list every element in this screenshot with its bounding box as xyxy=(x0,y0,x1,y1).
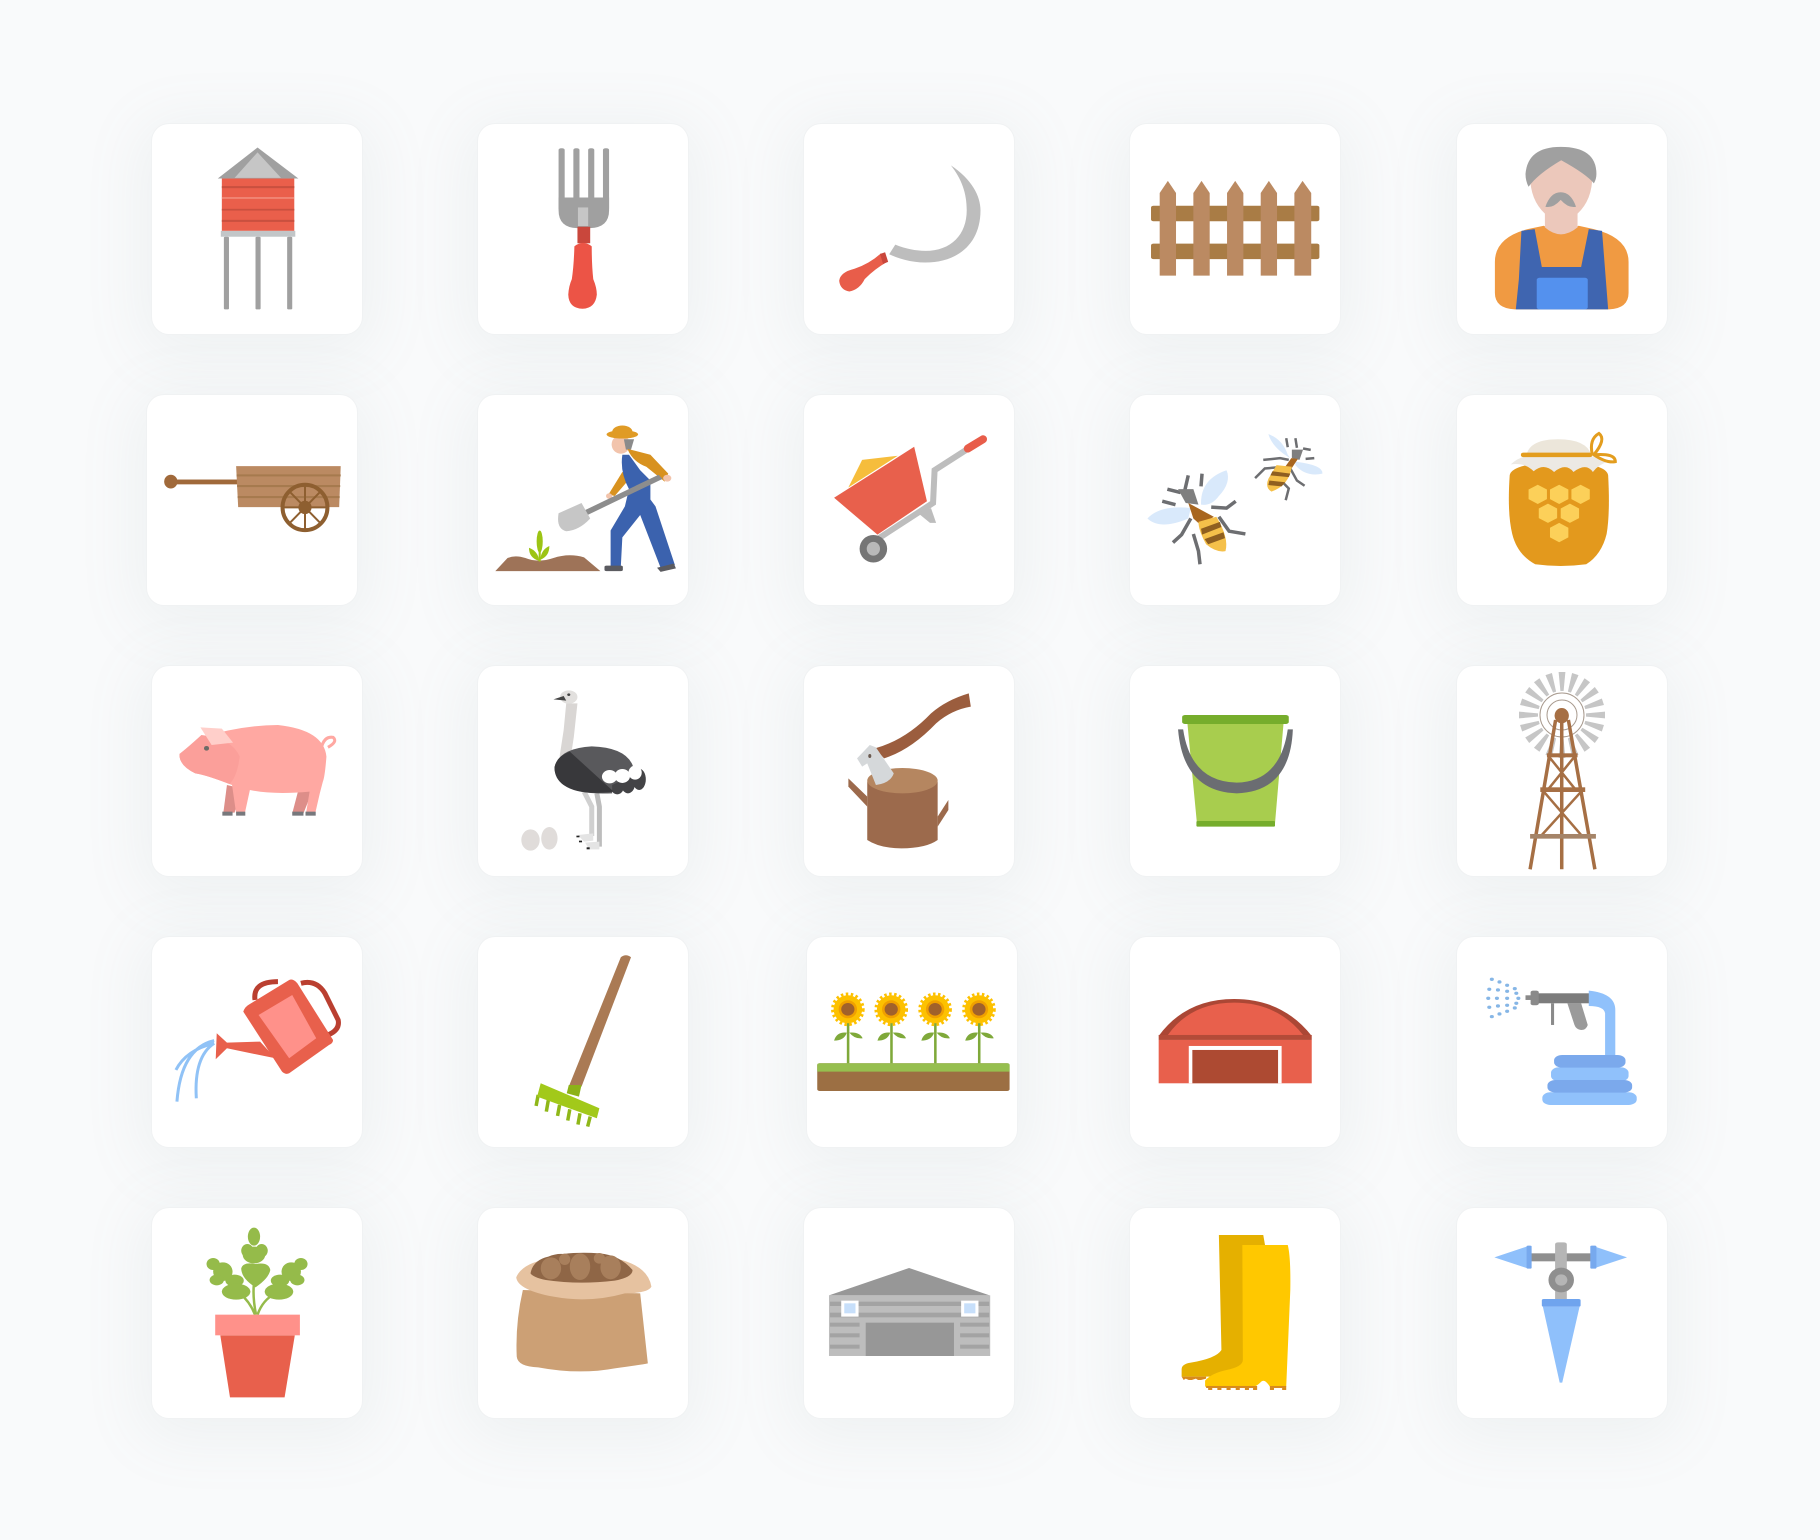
icon: seed sack xyxy=(516,1253,651,1371)
sunflower 1 xyxy=(833,994,863,1063)
panel: garden fork xyxy=(478,124,688,334)
panel: watering can xyxy=(152,937,362,1147)
sprinkler post xyxy=(1548,1242,1574,1301)
icon: honey jar xyxy=(1509,433,1615,566)
honeycomb xyxy=(1529,485,1590,542)
farmer head xyxy=(1530,159,1592,234)
fence posts xyxy=(1160,181,1311,276)
shovel xyxy=(558,475,663,531)
barrow grip xyxy=(968,439,983,449)
panel: potted plant xyxy=(152,1208,362,1418)
icon: pig xyxy=(179,725,335,816)
seeds xyxy=(531,1253,633,1283)
panel: farmer digging xyxy=(478,395,688,605)
large bee xyxy=(1147,470,1245,564)
can handles xyxy=(255,982,338,1035)
stump xyxy=(848,768,948,848)
barn wall xyxy=(1159,1040,1312,1083)
icon: irrigation sprinkler xyxy=(1494,1242,1627,1383)
panel: pig xyxy=(152,666,362,876)
panel: irrigation sprinkler xyxy=(1457,1208,1667,1418)
fork head xyxy=(559,148,609,228)
shed wall xyxy=(829,1295,990,1356)
ostrich legs xyxy=(576,792,599,849)
cart box xyxy=(236,466,341,507)
tower legs xyxy=(224,237,292,309)
barrow wheel xyxy=(860,535,887,563)
windmill tower xyxy=(1530,708,1596,869)
seedling xyxy=(529,530,549,561)
tower roof xyxy=(218,148,298,179)
panel: rake xyxy=(478,937,688,1147)
worker xyxy=(604,425,676,572)
small bee xyxy=(1255,434,1322,500)
icon: bucket xyxy=(1178,715,1293,827)
panel: fence xyxy=(1130,124,1340,334)
panel: seed sack xyxy=(478,1208,688,1418)
rake teeth xyxy=(536,1095,590,1127)
overalls xyxy=(1516,229,1608,309)
axe head xyxy=(857,745,894,785)
fork handle xyxy=(568,243,597,309)
icon: windmill xyxy=(1519,672,1605,869)
ostrich body xyxy=(554,746,646,794)
pig far legs xyxy=(223,785,313,813)
icon: storage shed xyxy=(829,1268,990,1356)
panel: water tower xyxy=(152,124,362,334)
plant leaves xyxy=(207,1228,308,1315)
fence rails xyxy=(1151,206,1319,259)
icon: garden hose xyxy=(1486,978,1637,1105)
panel: barn xyxy=(1130,937,1340,1147)
tower tank xyxy=(222,179,294,231)
icon: red barn xyxy=(1159,999,1312,1083)
panel: bees xyxy=(1130,395,1340,605)
icon: potted plant xyxy=(207,1228,308,1397)
sunflower 3 xyxy=(920,994,950,1063)
bucket handle xyxy=(1178,729,1293,793)
panel: rubber boots xyxy=(1130,1208,1340,1418)
icon: wheelbarrow xyxy=(834,439,983,563)
sack body xyxy=(516,1290,648,1371)
hose coils xyxy=(1542,1055,1637,1105)
icon: rubber boots xyxy=(1182,1235,1290,1390)
jar cloth xyxy=(1511,439,1607,472)
icon: water tower xyxy=(218,148,298,309)
jar bow xyxy=(1591,433,1615,462)
sickle handle xyxy=(839,253,887,291)
hose pipe xyxy=(1589,991,1615,1057)
rake handle xyxy=(569,955,631,1087)
icon: garden fork xyxy=(559,148,609,309)
barrow frame xyxy=(877,450,967,539)
panel: windmill xyxy=(1457,666,1667,876)
windmill wheel xyxy=(1519,672,1605,758)
icon: farmer portrait xyxy=(1495,147,1629,309)
farmer body xyxy=(1495,226,1629,309)
sack collar xyxy=(516,1258,651,1299)
icon: watering can xyxy=(176,980,338,1102)
pig body xyxy=(179,725,326,813)
icon: ostrich xyxy=(521,690,646,851)
panel: garden hose xyxy=(1457,937,1667,1147)
panel: bucket xyxy=(1130,666,1340,876)
back boot xyxy=(1182,1235,1265,1380)
barrow tray xyxy=(834,447,927,535)
panel: storage shed xyxy=(804,1208,1014,1418)
can spout xyxy=(216,1033,275,1059)
cart wheel xyxy=(283,485,327,530)
shed door xyxy=(866,1323,954,1356)
barn door xyxy=(1189,1046,1282,1083)
icon: wooden fence xyxy=(1151,181,1319,276)
sprinkler nozzles xyxy=(1494,1246,1627,1269)
sunflower 2 xyxy=(876,994,907,1063)
icon: bees xyxy=(1147,434,1322,564)
water stream xyxy=(176,1041,214,1102)
ostrich neck and head xyxy=(553,690,577,757)
sprinkler stake xyxy=(1542,1299,1581,1383)
front boot xyxy=(1205,1245,1290,1390)
icon: rake xyxy=(536,955,631,1127)
panel: ostrich xyxy=(478,666,688,876)
bucket rims xyxy=(1182,715,1289,827)
sunflower 4 xyxy=(964,994,994,1063)
cart handle xyxy=(164,475,238,488)
soil bed xyxy=(817,1063,1010,1091)
panel: sickle xyxy=(804,124,1014,334)
barn roof xyxy=(1159,999,1312,1040)
icon: sunflower bed xyxy=(817,994,1010,1091)
shed windows xyxy=(841,1301,978,1317)
bucket body xyxy=(1187,722,1284,823)
shed roof xyxy=(829,1268,990,1295)
panel: cart xyxy=(147,395,357,605)
pig hooves xyxy=(222,812,316,816)
can body xyxy=(243,980,333,1074)
icon: farmer digging xyxy=(495,425,676,572)
eggs xyxy=(521,827,558,851)
rake head xyxy=(537,1083,599,1118)
panel: honey jar xyxy=(1457,395,1667,605)
plant pot xyxy=(215,1315,300,1397)
icon: axe in stump xyxy=(848,693,971,848)
icon: wooden cart xyxy=(164,466,341,530)
panel: farmer xyxy=(1457,124,1667,334)
water spray xyxy=(1486,978,1520,1018)
soil mound xyxy=(495,555,600,571)
sprinkler bar xyxy=(1531,1253,1592,1261)
panel: wheelbarrow xyxy=(804,395,1014,605)
spray nozzle xyxy=(1526,991,1590,1030)
panel: axe and stump xyxy=(804,666,1014,876)
icon: sickle xyxy=(839,165,981,291)
axe handle xyxy=(875,693,971,758)
panel: sunflowers xyxy=(807,937,1017,1147)
sickle blade xyxy=(889,165,981,263)
jar body xyxy=(1509,462,1609,566)
